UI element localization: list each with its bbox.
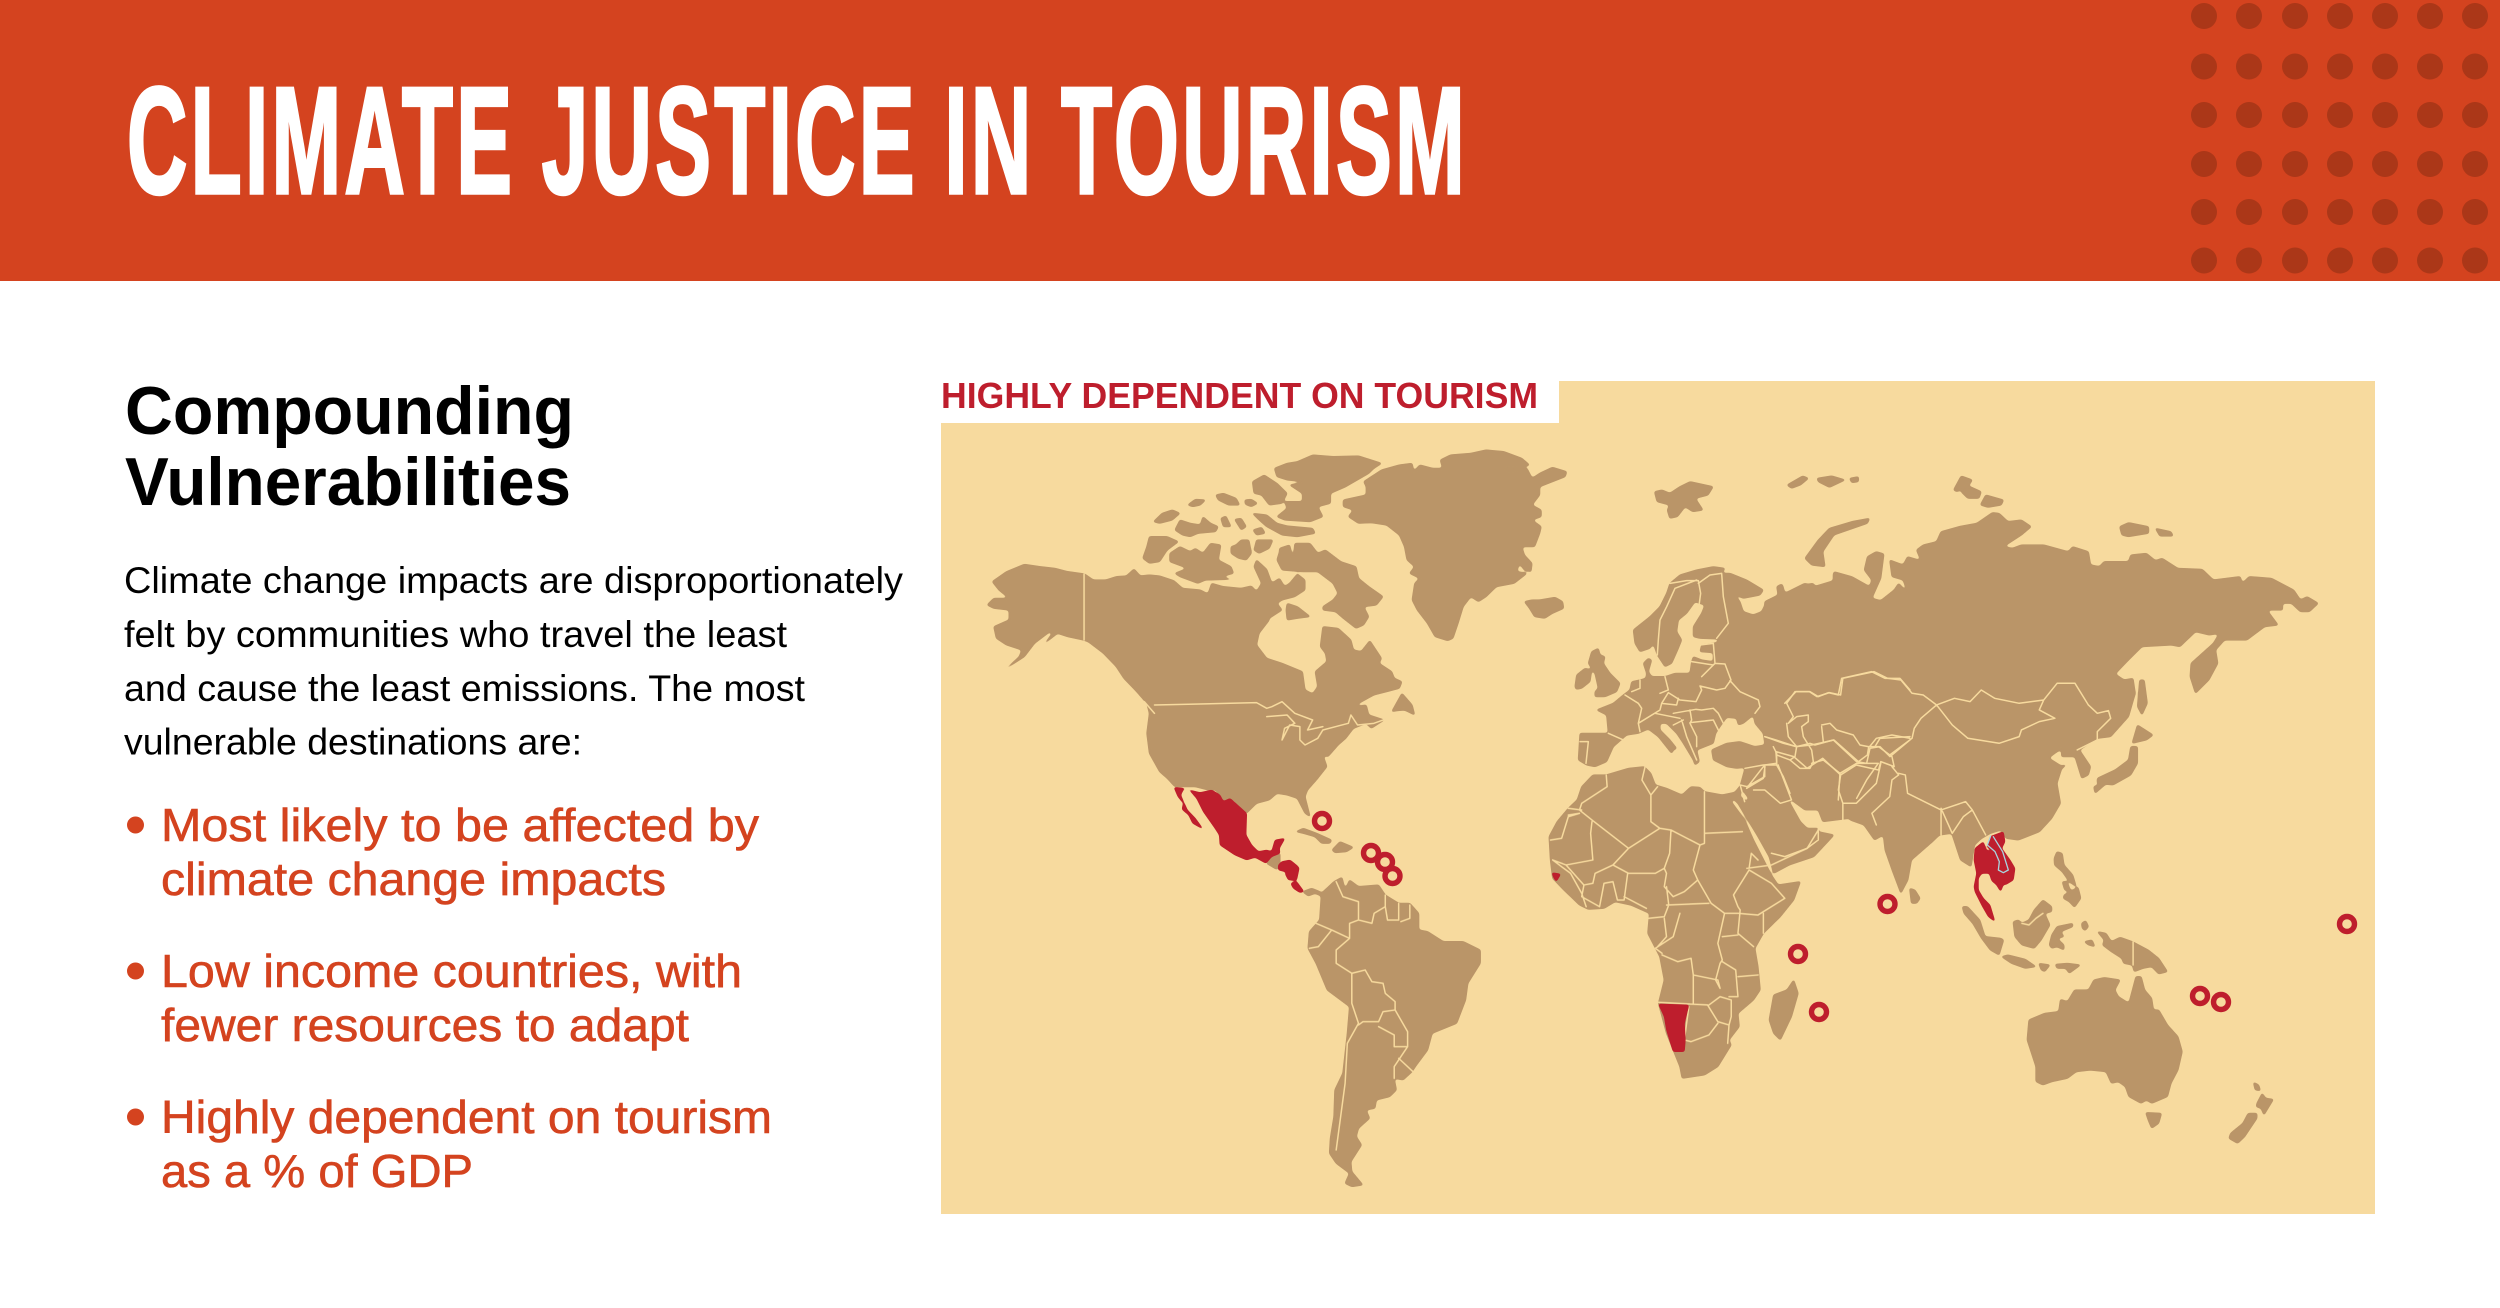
bullet: dependent on tourism: as a % of GDP bbox=[161, 1145, 473, 1197]
intro text block: Climate change impacts are disproportionately bbox=[124, 560, 903, 601]
heading: Compounding Vulnerabilities bbox=[125, 373, 574, 520]
header banner bbox=[0, 0, 2500, 281]
South Asia, South East Asia and Oceania bbox=[1850, 750, 2273, 1143]
intro text block bbox=[124, 560, 903, 762]
country borders bbox=[1084, 573, 2133, 1150]
Caribbean and Central America land bbox=[1267, 828, 1353, 897]
North America and Greenland bbox=[987, 450, 1713, 817]
Namibia and Gambia highlighted bbox=[1552, 873, 1689, 1052]
bullet: most likely affected bbox=[127, 799, 759, 905]
bullet: dependent on tourism: Highly dependent on tourism bbox=[161, 1091, 772, 1143]
bullet: dependent on tourism bbox=[127, 1091, 772, 1197]
intro text block: and cause the least emissions. The most bbox=[124, 668, 806, 709]
bullet list bbox=[127, 799, 772, 1197]
bullet: most likely affected: climate change impacts bbox=[161, 853, 666, 905]
intro text block: felt by communities who travel the least bbox=[124, 614, 788, 655]
Mexico and Central America highlighted bbox=[1174, 787, 1304, 893]
bullet: most likely affected: Most likely to be affected by bbox=[161, 799, 759, 851]
intro text block: vulnerable destinations are: bbox=[124, 722, 582, 762]
dot pattern bbox=[2191, 3, 2488, 274]
Africa, Arabia and South America bbox=[1308, 767, 1834, 1187]
Mekong border line bbox=[1987, 836, 2008, 873]
bullet: low income countries: Low income countries, with bbox=[161, 945, 742, 997]
Asia north and Japan bbox=[1765, 476, 2318, 822]
Europe bbox=[1575, 567, 1910, 800]
bullet: low income countries bbox=[127, 945, 742, 1051]
title: CLIMATE JUSTICE IN TOURISM bbox=[127, 56, 1468, 226]
map label: highly dependent on tourism: HIGHLY DEPENDENT ON TOURISM bbox=[941, 375, 1538, 416]
land masses bbox=[987, 450, 2318, 1187]
highlighted countries bbox=[1174, 787, 2015, 1052]
map panel bbox=[941, 375, 2375, 1214]
Thailand, Laos, Cambodia, Vietnam highlighted bbox=[1974, 832, 2015, 922]
island destination markers bbox=[1314, 814, 2354, 1020]
heading: Compounding Vulnerabilities: Vulnerabilities bbox=[125, 444, 571, 520]
bullet: low income countries: fewer resources to adapt bbox=[161, 999, 689, 1051]
heading: Compounding Vulnerabilities: Compounding bbox=[125, 373, 574, 449]
